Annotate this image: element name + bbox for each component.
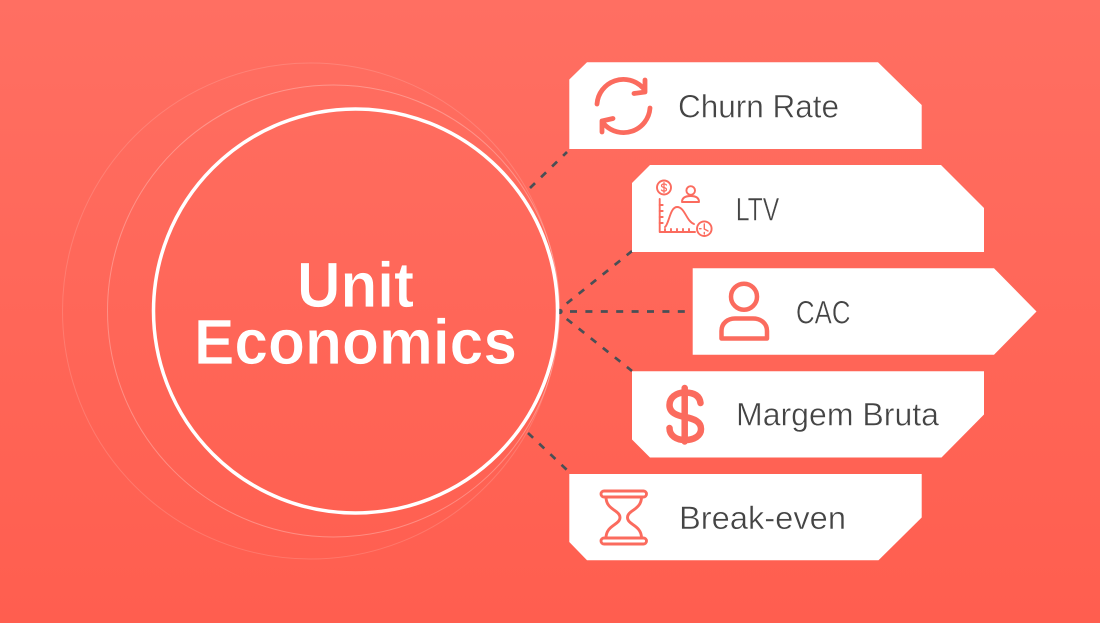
label: LTV — [736, 192, 780, 228]
label: Break-even — [679, 500, 846, 536]
icon: dollar sign — [670, 388, 701, 442]
icon: hourglass — [601, 491, 646, 544]
panel: break-even — [569, 474, 922, 560]
central circle — [154, 109, 558, 513]
connector: break-even — [528, 433, 567, 470]
title: Unit Economics: Unit — [297, 249, 414, 321]
label: CAC — [796, 294, 850, 330]
panel: churn rate — [569, 62, 922, 149]
panel: margem bruta — [632, 371, 984, 458]
label: Margem Bruta — [736, 397, 939, 433]
connector: CAC — [570, 310, 688, 313]
connector: margem bruta — [567, 319, 632, 371]
connector: churn rate — [530, 152, 567, 188]
title: Unit Economics: Economics — [194, 306, 517, 378]
icon: circular arrows — [597, 79, 650, 133]
connector origin dot — [557, 309, 563, 314]
connector: LTV — [567, 251, 632, 304]
label: Churn Rate — [678, 89, 839, 125]
middle decorative circle — [108, 85, 560, 537]
title: Unit Economics — [194, 249, 517, 378]
outer decorative circle — [62, 63, 558, 559]
icon: LTV chart — [657, 180, 712, 236]
panel: CAC — [693, 268, 1036, 355]
icon: user — [722, 284, 767, 338]
panel: LTV — [632, 165, 984, 252]
